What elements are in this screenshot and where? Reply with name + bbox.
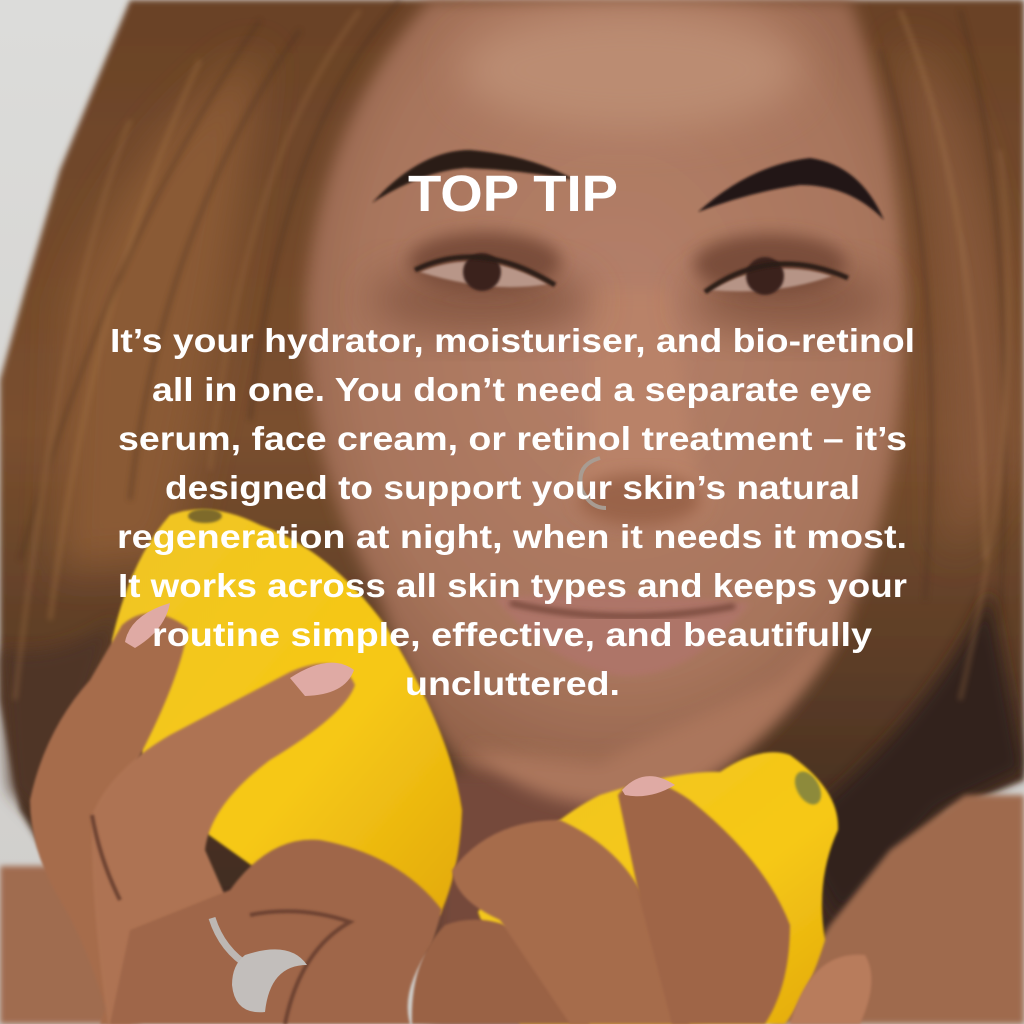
- eye socket shading: [370, 266, 590, 334]
- body text: regeneration at night, when it needs it most.: [117, 518, 907, 555]
- body text: uncluttered.: [405, 665, 620, 702]
- nose ring: [580, 458, 606, 508]
- lower finger: [412, 920, 590, 1024]
- pinky finger: [790, 955, 871, 1024]
- body text: routine simple, effective, and beautifully: [152, 616, 873, 653]
- body text: all in one. You don’t need a separate eye: [152, 371, 872, 408]
- body text: [110, 322, 915, 702]
- title: TOP TIP: [408, 165, 618, 222]
- mouth: [495, 595, 750, 676]
- body text: It works across all skin types and keeps your: [118, 567, 907, 604]
- lower fingers: [110, 840, 442, 1024]
- face: [305, 0, 906, 1024]
- shoulders and chest: [0, 795, 1024, 1024]
- left eye: [409, 232, 561, 292]
- fist finger: [452, 820, 690, 1024]
- right eyebrow: [698, 158, 884, 220]
- fingernails: [125, 603, 170, 648]
- left eyebrow: [372, 150, 575, 203]
- nose: [572, 290, 709, 525]
- forehead highlight: [460, 10, 800, 130]
- thumb: [618, 781, 790, 1024]
- right eye: [694, 234, 848, 295]
- thumbnail: [622, 776, 675, 796]
- right hand: [412, 776, 871, 1024]
- small lemon: [478, 752, 838, 1024]
- body text: It’s your hydrator, moisturiser, and bio-retinol: [110, 322, 915, 359]
- index finger: [92, 664, 355, 1024]
- left hand: [30, 603, 442, 1024]
- neck: [430, 770, 730, 1024]
- large lemon: [112, 509, 462, 915]
- ring: [212, 918, 307, 1012]
- body text: designed to support your skin’s natural: [165, 469, 860, 506]
- body text: serum, face cream, or retinol treatment – it’s: [118, 420, 907, 457]
- upper finger: [30, 613, 188, 1024]
- hair strands: [15, 0, 1009, 700]
